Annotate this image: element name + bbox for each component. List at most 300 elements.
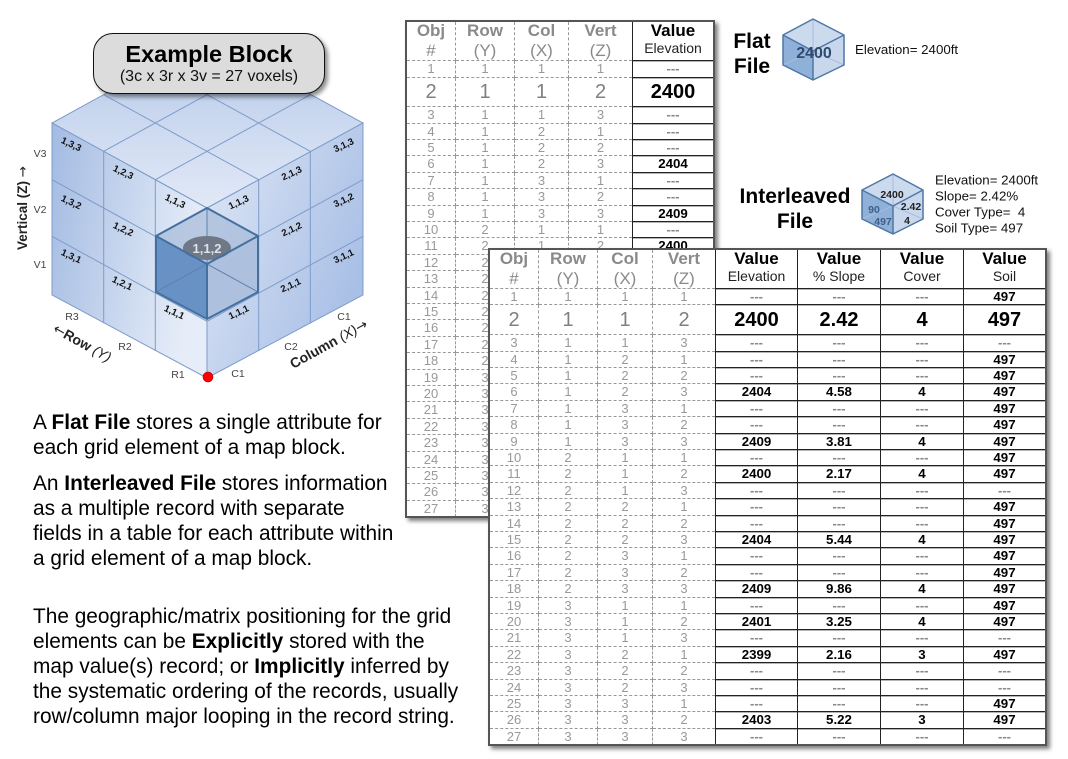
table: interleaved file records: 1 — [621, 450, 629, 464]
table: interleaved file records: 1 — [562, 308, 574, 330]
text block: interleaved file definition: fields in a table for each attribute within — [33, 522, 393, 545]
heading: flat file: File — [734, 55, 770, 78]
table: interleaved file records: 3 — [680, 335, 688, 350]
table: interleaved file records: 3 — [680, 434, 688, 448]
table: interleaved file records: --- — [750, 598, 763, 612]
table: interleaved file records: 2409 — [742, 434, 771, 448]
text block: flat file definition: A Flat File stores a single attribute for — [33, 411, 382, 434]
table: flat file records: 1 — [538, 107, 545, 122]
table: interleaved file records: Value — [817, 249, 861, 268]
table: flat file records: 1 — [536, 81, 547, 103]
table: flat file records: 3 — [481, 418, 489, 434]
table: interleaved file records: 18 — [507, 581, 521, 596]
table: interleaved file records: 15 — [507, 532, 521, 546]
text block: explicit and implicit positioning: row/column major looping in the record string. — [33, 705, 455, 728]
table: flat file records: 24 — [424, 452, 438, 466]
table: interleaved file records: --- — [916, 499, 928, 514]
table: flat file records — [405, 20, 715, 518]
table: flat file records: 2404 — [658, 156, 688, 171]
table: interleaved file records: 1 — [680, 352, 688, 366]
table: interleaved file records: --- — [916, 368, 928, 382]
table: interleaved file records: --- — [998, 482, 1011, 498]
table: flat file records: 16 — [424, 320, 438, 335]
table: interleaved file records: 1 — [621, 335, 629, 350]
table: interleaved file records: 25 — [507, 696, 521, 710]
table: interleaved file records: --- — [916, 663, 928, 678]
table: interleaved file records: --- — [832, 663, 846, 678]
table: flat file records: 1 — [481, 107, 489, 122]
table: interleaved file records: 23 — [507, 663, 521, 678]
table: interleaved file records: 3 — [564, 712, 572, 727]
vertical level labels: V2 — [34, 204, 47, 216]
text block: interleaved file definition: An Interleaved File stores information — [33, 472, 388, 495]
table: interleaved file records: --- — [916, 417, 928, 432]
table: interleaved file records: Value — [982, 249, 1027, 268]
table: interleaved file records: 497 — [993, 548, 1016, 563]
table: flat file records: 1 — [538, 61, 545, 76]
table: interleaved file records: 13 — [507, 499, 521, 514]
table: flat file records: 2 — [597, 238, 604, 253]
column axis title: Column (X)→ — [287, 316, 371, 372]
table: interleaved file records: 1 — [680, 450, 688, 464]
voxel labels on left face: 1,2,3 — [111, 163, 135, 182]
table: interleaved file records: 3 — [621, 564, 629, 580]
icon: interleaved file voxel with attributes: 2400 — [880, 189, 904, 201]
table: interleaved file records: 2 — [621, 532, 629, 546]
icon: flat file voxel and elevation label: Elevation= 2400ft — [855, 42, 958, 57]
table: interleaved file records: (Y) — [557, 269, 579, 288]
icon: interleaved file voxel with attributes: 2.42 — [901, 201, 921, 213]
table: interleaved file records: 497 — [993, 352, 1016, 366]
table: flat file records: Row — [467, 21, 503, 40]
vertical level labels — [34, 148, 47, 271]
table: interleaved file records: --- — [916, 696, 928, 710]
table: interleaved file records: 14 — [507, 516, 521, 530]
table: interleaved file records: 1 — [680, 548, 688, 563]
table: interleaved file records: 497 — [993, 696, 1016, 710]
text block: explicit and implicit positioning: map value(s) record; or Implicitly inferred by — [33, 655, 449, 678]
table: flat file records: 2 — [481, 353, 489, 368]
row labels: R2 — [118, 341, 132, 353]
title: Example Block — [125, 41, 293, 67]
table: flat file records: 3 — [481, 370, 489, 384]
table: interleaved file records: 2 — [508, 308, 520, 330]
table: interleaved file records: Value — [734, 249, 779, 268]
icon: interleaved file voxel with attributes: Elevation= 2400ft — [935, 172, 1038, 188]
table: interleaved file records: 497 — [993, 532, 1016, 546]
table: flat file records: 14 — [424, 288, 438, 302]
table: interleaved file records: 3 — [680, 728, 688, 744]
table: flat file records: 1 — [597, 124, 604, 138]
table: interleaved file records: 1 — [680, 288, 688, 304]
table: interleaved file records: --- — [916, 288, 928, 304]
table: interleaved file records: 2 — [680, 466, 688, 481]
table: interleaved file records: 3 — [680, 581, 688, 596]
voxel labels on left face: 1,3,1 — [59, 247, 84, 266]
table: interleaved file records: 2 — [564, 548, 572, 563]
table: interleaved file records: 2.16 — [826, 646, 852, 662]
table: interleaved file records: Cover — [903, 268, 941, 284]
table: interleaved file records: Soil — [993, 268, 1016, 284]
table: flat file records: 2409 — [658, 206, 688, 220]
table: interleaved file records: --- — [750, 482, 763, 498]
subtitle: (3c x 3r x 3v = 27 voxels) — [120, 68, 298, 85]
table: interleaved file records: 4 — [510, 352, 518, 366]
text block: explicit and implicit positioning: The geographic/matrix positioning for the grid — [33, 605, 451, 628]
table: flat file records: 2 — [481, 271, 489, 286]
table: interleaved file records: 1 — [680, 598, 688, 612]
row labels: R1 — [171, 369, 185, 381]
table: flat file records: 26 — [424, 484, 438, 499]
table: interleaved file records: 2 — [564, 499, 572, 514]
table: flat file records: 18 — [424, 353, 438, 368]
table: interleaved file records: --- — [750, 499, 763, 514]
table: interleaved file records: 3.25 — [826, 614, 852, 628]
table: interleaved file records: 27 — [507, 728, 521, 744]
table: interleaved file records: 2 — [678, 308, 690, 330]
table: interleaved file records: 21 — [507, 630, 521, 645]
table: interleaved file records: 6 — [510, 384, 518, 399]
table: interleaved file records: 3 — [680, 532, 688, 546]
voxel labels on left face: 1,3,3 — [59, 135, 83, 154]
table: flat file records: 2 — [481, 254, 489, 270]
voxel labels on right face: 2,1,1 — [279, 276, 303, 295]
table: interleaved file records: --- — [998, 335, 1011, 350]
table: flat file records: 1 — [481, 189, 489, 204]
table: interleaved file records: Row — [550, 249, 586, 268]
table: flat file records: 3 — [481, 386, 489, 400]
table: flat file records: 22 — [424, 418, 438, 434]
table: interleaved file records: 1 — [680, 696, 688, 710]
table: interleaved file records: 3 — [564, 630, 572, 645]
table: interleaved file records: 4 — [918, 614, 926, 628]
table: interleaved file records: 2404 — [742, 532, 771, 546]
table: interleaved file records: --- — [916, 680, 928, 694]
table: interleaved file records: --- — [750, 368, 763, 382]
icon: interleaved file voxel with attributes: 90 — [868, 204, 880, 216]
highlighted voxel 1,1,2 — [156, 208, 258, 319]
table: interleaved file records: --- — [998, 663, 1011, 678]
table: flat file records: 1 — [597, 172, 604, 188]
table: interleaved file records: --- — [916, 564, 928, 580]
table: interleaved file records: 3 — [564, 598, 572, 612]
table: interleaved file records: 1 — [621, 466, 629, 481]
vertical level labels: V3 — [34, 148, 47, 160]
table: interleaved file records: 497 — [993, 434, 1016, 448]
table: interleaved file records: 2 — [680, 663, 688, 678]
table: interleaved file records: 1 — [621, 614, 629, 628]
table: interleaved file records: Col — [611, 249, 639, 268]
table: interleaved file records: 4 — [918, 532, 926, 546]
table: flat file records: --- — [666, 189, 680, 204]
table: interleaved file records: 3.81 — [826, 434, 852, 448]
table: flat file records: --- — [666, 124, 680, 138]
table: interleaved file records: 2 — [621, 663, 629, 678]
table: interleaved file records: 3 — [564, 663, 572, 678]
table: flat file records: 1 — [481, 140, 489, 154]
table: flat file records: 3 — [481, 402, 489, 417]
table: flat file records: 2 — [538, 140, 545, 154]
table: flat file records: (X) — [530, 41, 553, 60]
table: interleaved file records: --- — [832, 482, 846, 498]
table: flat file records: --- — [666, 222, 680, 236]
table: interleaved file records: --- — [750, 450, 763, 464]
table: interleaved file records: 2 — [564, 466, 572, 481]
table: interleaved file records: 497 — [993, 646, 1016, 662]
table: interleaved file records: --- — [750, 548, 763, 563]
table: interleaved file records: --- — [832, 335, 846, 350]
text block: interleaved file definition — [33, 472, 393, 570]
table: interleaved file records: 4 — [918, 434, 926, 448]
table: interleaved file records: 2 — [621, 646, 629, 662]
table: flat file records: 1 — [538, 238, 545, 253]
table: interleaved file records: 2 — [680, 516, 688, 530]
table: interleaved file records: 2 — [564, 581, 572, 596]
origin red dot — [203, 372, 213, 382]
table: interleaved file records: 9.86 — [826, 581, 852, 596]
table: interleaved file records: Vert — [668, 249, 700, 268]
table: flat file records: --- — [666, 107, 680, 122]
table: interleaved file records: 497 — [993, 400, 1016, 416]
table: interleaved file records: --- — [832, 564, 846, 580]
table: interleaved file records: 3 — [564, 728, 572, 744]
table: flat file records: 2 — [481, 304, 489, 318]
table: flat file records: 5 — [427, 140, 435, 154]
table: interleaved file records: 1 — [680, 499, 688, 514]
table: flat file records: 2 — [425, 81, 437, 103]
table: flat file records: 4 — [427, 124, 435, 138]
table: flat file records: Elevation — [644, 40, 702, 56]
table: flat file records: 3 — [538, 189, 545, 204]
table: flat file records: 3 — [538, 172, 545, 188]
table: flat file records: 3 — [481, 484, 489, 499]
heading: interleaved file — [740, 185, 850, 233]
table: flat file records: 1 — [538, 222, 545, 236]
table: flat file records: Value — [651, 21, 695, 40]
table: flat file records: 25 — [424, 468, 438, 482]
table: interleaved file records: --- — [832, 400, 846, 416]
voxel labels on right face: 3,1,2 — [332, 191, 356, 210]
table: interleaved file records: 12 — [507, 482, 521, 498]
table: flat file records: 2 — [538, 156, 545, 171]
table: interleaved file records: (Z) — [673, 269, 695, 288]
table: interleaved file records: 2 — [621, 352, 629, 366]
table: interleaved file records: --- — [832, 728, 846, 744]
table: flat file records: 2 — [595, 81, 606, 103]
table: flat file records: Obj — [417, 21, 445, 40]
table: interleaved file records: 22 — [507, 646, 521, 662]
table: interleaved file records: 2 — [564, 516, 572, 530]
table: interleaved file records: 26 — [507, 712, 521, 727]
table: interleaved file records: 497 — [993, 466, 1016, 481]
table: interleaved file records: 497 — [993, 712, 1016, 727]
table: interleaved file records: 2 — [621, 384, 629, 399]
table: interleaved file records: 497 — [993, 598, 1016, 612]
table: interleaved file records: 3 — [621, 434, 629, 448]
table: flat file records: 1 — [597, 61, 604, 76]
table: interleaved file records: 1 — [621, 598, 629, 612]
table: interleaved file records: 2400 — [734, 308, 779, 330]
table: interleaved file records: 2 — [680, 368, 688, 382]
table: interleaved file records: 2399 — [742, 646, 771, 662]
table: flat file records: 3 — [597, 206, 604, 220]
table: flat file records: 3 — [481, 452, 489, 466]
table: interleaved file records: 11 — [507, 466, 521, 481]
table: interleaved file records: 1 — [621, 288, 629, 304]
icon: interleaved file voxel with attributes: 4 — [904, 215, 910, 227]
icon: interleaved file voxel with attributes: 497 — [874, 216, 892, 228]
table: interleaved file records: 3 — [564, 680, 572, 694]
table: interleaved file records: 3 — [621, 581, 629, 596]
table: flat file records: 19 — [424, 370, 438, 384]
table: flat file records: 3 — [427, 107, 435, 122]
table: flat file records: 7 — [427, 172, 435, 188]
table: interleaved file records: --- — [998, 728, 1011, 744]
table: interleaved file records: --- — [832, 598, 846, 612]
table: interleaved file records: 3 — [510, 335, 518, 350]
table: flat file records: 9 — [427, 206, 435, 220]
left face of cube — [52, 123, 207, 378]
vertical level labels: V1 — [34, 259, 47, 271]
table: interleaved file records: 2403 — [742, 712, 771, 727]
voxel labels on left face: 1,2,1 — [110, 274, 135, 293]
table: flat file records: 2 — [481, 288, 489, 302]
table: interleaved file records: 7 — [510, 400, 518, 416]
table: interleaved file records: Elevation — [728, 268, 785, 284]
text block: explicit and implicit positioning — [33, 605, 458, 728]
table: interleaved file records: --- — [832, 516, 846, 530]
table: flat file records: 3 — [597, 156, 604, 171]
table: flat file records: 27 — [424, 500, 438, 516]
table: interleaved file records: 3 — [621, 400, 629, 416]
table: flat file records: 10 — [424, 222, 438, 236]
row axis title: ←Row (Y) — [50, 320, 114, 366]
table: interleaved file records: 4 — [916, 308, 928, 330]
column labels: C1 — [337, 311, 351, 323]
table: interleaved file records: 5.22 — [826, 712, 852, 727]
table: flat file records: 1 — [481, 156, 489, 171]
table: flat file records: (Y) — [474, 41, 496, 60]
table: flat file records: 1 — [597, 222, 604, 236]
table: interleaved file records: --- — [998, 630, 1011, 645]
top face of cube — [52, 38, 363, 208]
table: interleaved file records: 16 — [507, 548, 521, 563]
table: interleaved file records: 1 — [621, 482, 629, 498]
icon: interleaved file voxel with attributes: Cover Type= 4 — [935, 204, 1025, 220]
table: interleaved file records: --- — [750, 417, 763, 432]
table: interleaved file records: 3 — [564, 614, 572, 628]
text block: explicit and implicit positioning: the systematic ordering of the records, usually — [33, 680, 458, 703]
table: flat file records: 20 — [424, 386, 438, 400]
table: interleaved file records: --- — [916, 450, 928, 464]
table: flat file records: 17 — [424, 336, 438, 352]
table: flat file records: 3 — [481, 435, 489, 450]
table: interleaved file records: 2.17 — [826, 466, 852, 481]
example block cube diagram — [15, 92, 371, 382]
voxel labels on right face: 1,1,1 — [227, 303, 251, 322]
table: interleaved file records: --- — [832, 680, 846, 694]
table: interleaved file records: 497 — [993, 499, 1016, 514]
callout: example block title — [93, 33, 325, 94]
table: interleaved file records: 3 — [621, 548, 629, 563]
icon: interleaved file voxel with attributes: Slope= 2.42% — [935, 188, 1018, 204]
table: flat file records: 12 — [424, 254, 438, 270]
table: flat file records: 15 — [424, 304, 438, 318]
icon: flat file voxel and elevation label: 2400 — [796, 45, 832, 62]
table: flat file records: 3 — [481, 500, 489, 516]
table: flat file records: 3 — [481, 468, 489, 482]
text block: interleaved file definition: as a multiple record with separate — [33, 497, 345, 520]
table: flat file records: 21 — [424, 402, 438, 417]
table: interleaved file records: 497 — [993, 614, 1016, 628]
table: interleaved file records: --- — [750, 680, 763, 694]
voxel labels on left face — [59, 135, 187, 322]
table: interleaved file records: --- — [916, 548, 928, 563]
table: interleaved file records: 2 — [680, 712, 688, 727]
table: flat file records: 13 — [424, 271, 438, 286]
table: flat file records: 23 — [424, 435, 438, 450]
table: interleaved file records: 2.42 — [820, 308, 858, 330]
table: flat file records: 2 — [538, 124, 545, 138]
table: interleaved file records: 2 — [680, 417, 688, 432]
voxel labels on right face — [227, 136, 356, 322]
table: interleaved file records: --- — [750, 335, 763, 350]
table: interleaved file records: 4 — [918, 384, 926, 399]
table: interleaved file records: 5 — [510, 368, 518, 382]
icon: interleaved file voxel with attributes: Soil Type= 497 — [935, 220, 1023, 236]
table: flat file records: 2400 — [658, 238, 688, 253]
heading: flat file: Flat — [733, 30, 771, 53]
table: interleaved file records: 3 — [918, 712, 926, 727]
table: interleaved file records: 20 — [507, 614, 521, 628]
table: interleaved file records: --- — [832, 696, 846, 710]
voxel labels on right face: 2,1,3 — [280, 164, 304, 183]
voxel labels on right face: 3,1,3 — [332, 136, 356, 155]
table: interleaved file records: 1 — [564, 417, 572, 432]
table: interleaved file records: 2 — [680, 564, 688, 580]
table: interleaved file records: 2401 — [742, 614, 771, 628]
table: interleaved file records: Obj — [500, 249, 528, 268]
voxel labels on right face: 1,1,3 — [227, 193, 251, 212]
table: interleaved file records: 3 — [621, 728, 629, 744]
table: interleaved file records: 3 — [918, 646, 926, 662]
column labels: C2 — [284, 341, 298, 353]
voxel labels on left face: 1,3,2 — [59, 193, 83, 212]
table: interleaved file records: 1 — [564, 335, 572, 350]
table: interleaved file records: --- — [832, 417, 846, 432]
table: interleaved file records: --- — [750, 696, 763, 710]
table: flat file records: 2 — [597, 140, 604, 154]
text block: explicit and implicit positioning: elements can be Explicitly stored with the — [33, 630, 425, 653]
table: interleaved file records: 1 — [619, 308, 631, 330]
table: flat file records: Col — [528, 21, 555, 40]
table: interleaved file records: 4 — [918, 581, 926, 596]
table: flat file records: --- — [666, 140, 680, 154]
table: interleaved file records: (X) — [614, 269, 636, 288]
table: interleaved file records: 3 — [621, 417, 629, 432]
heading: interleaved file: Interleaved — [740, 185, 850, 208]
table: interleaved file records: 1 — [510, 288, 518, 304]
table: interleaved file records: 5.44 — [826, 532, 852, 546]
table: flat file records: --- — [666, 61, 680, 76]
voxel labels on left face: 1,1,1 — [162, 303, 187, 322]
table: flat file records: 2400 — [651, 81, 695, 103]
right face of cube — [207, 123, 363, 378]
table: interleaved file records: 8 — [510, 417, 518, 432]
column labels: C1 — [231, 368, 245, 380]
table: flat file records: 1 — [481, 124, 489, 138]
table: interleaved file records: 1 — [564, 352, 572, 366]
